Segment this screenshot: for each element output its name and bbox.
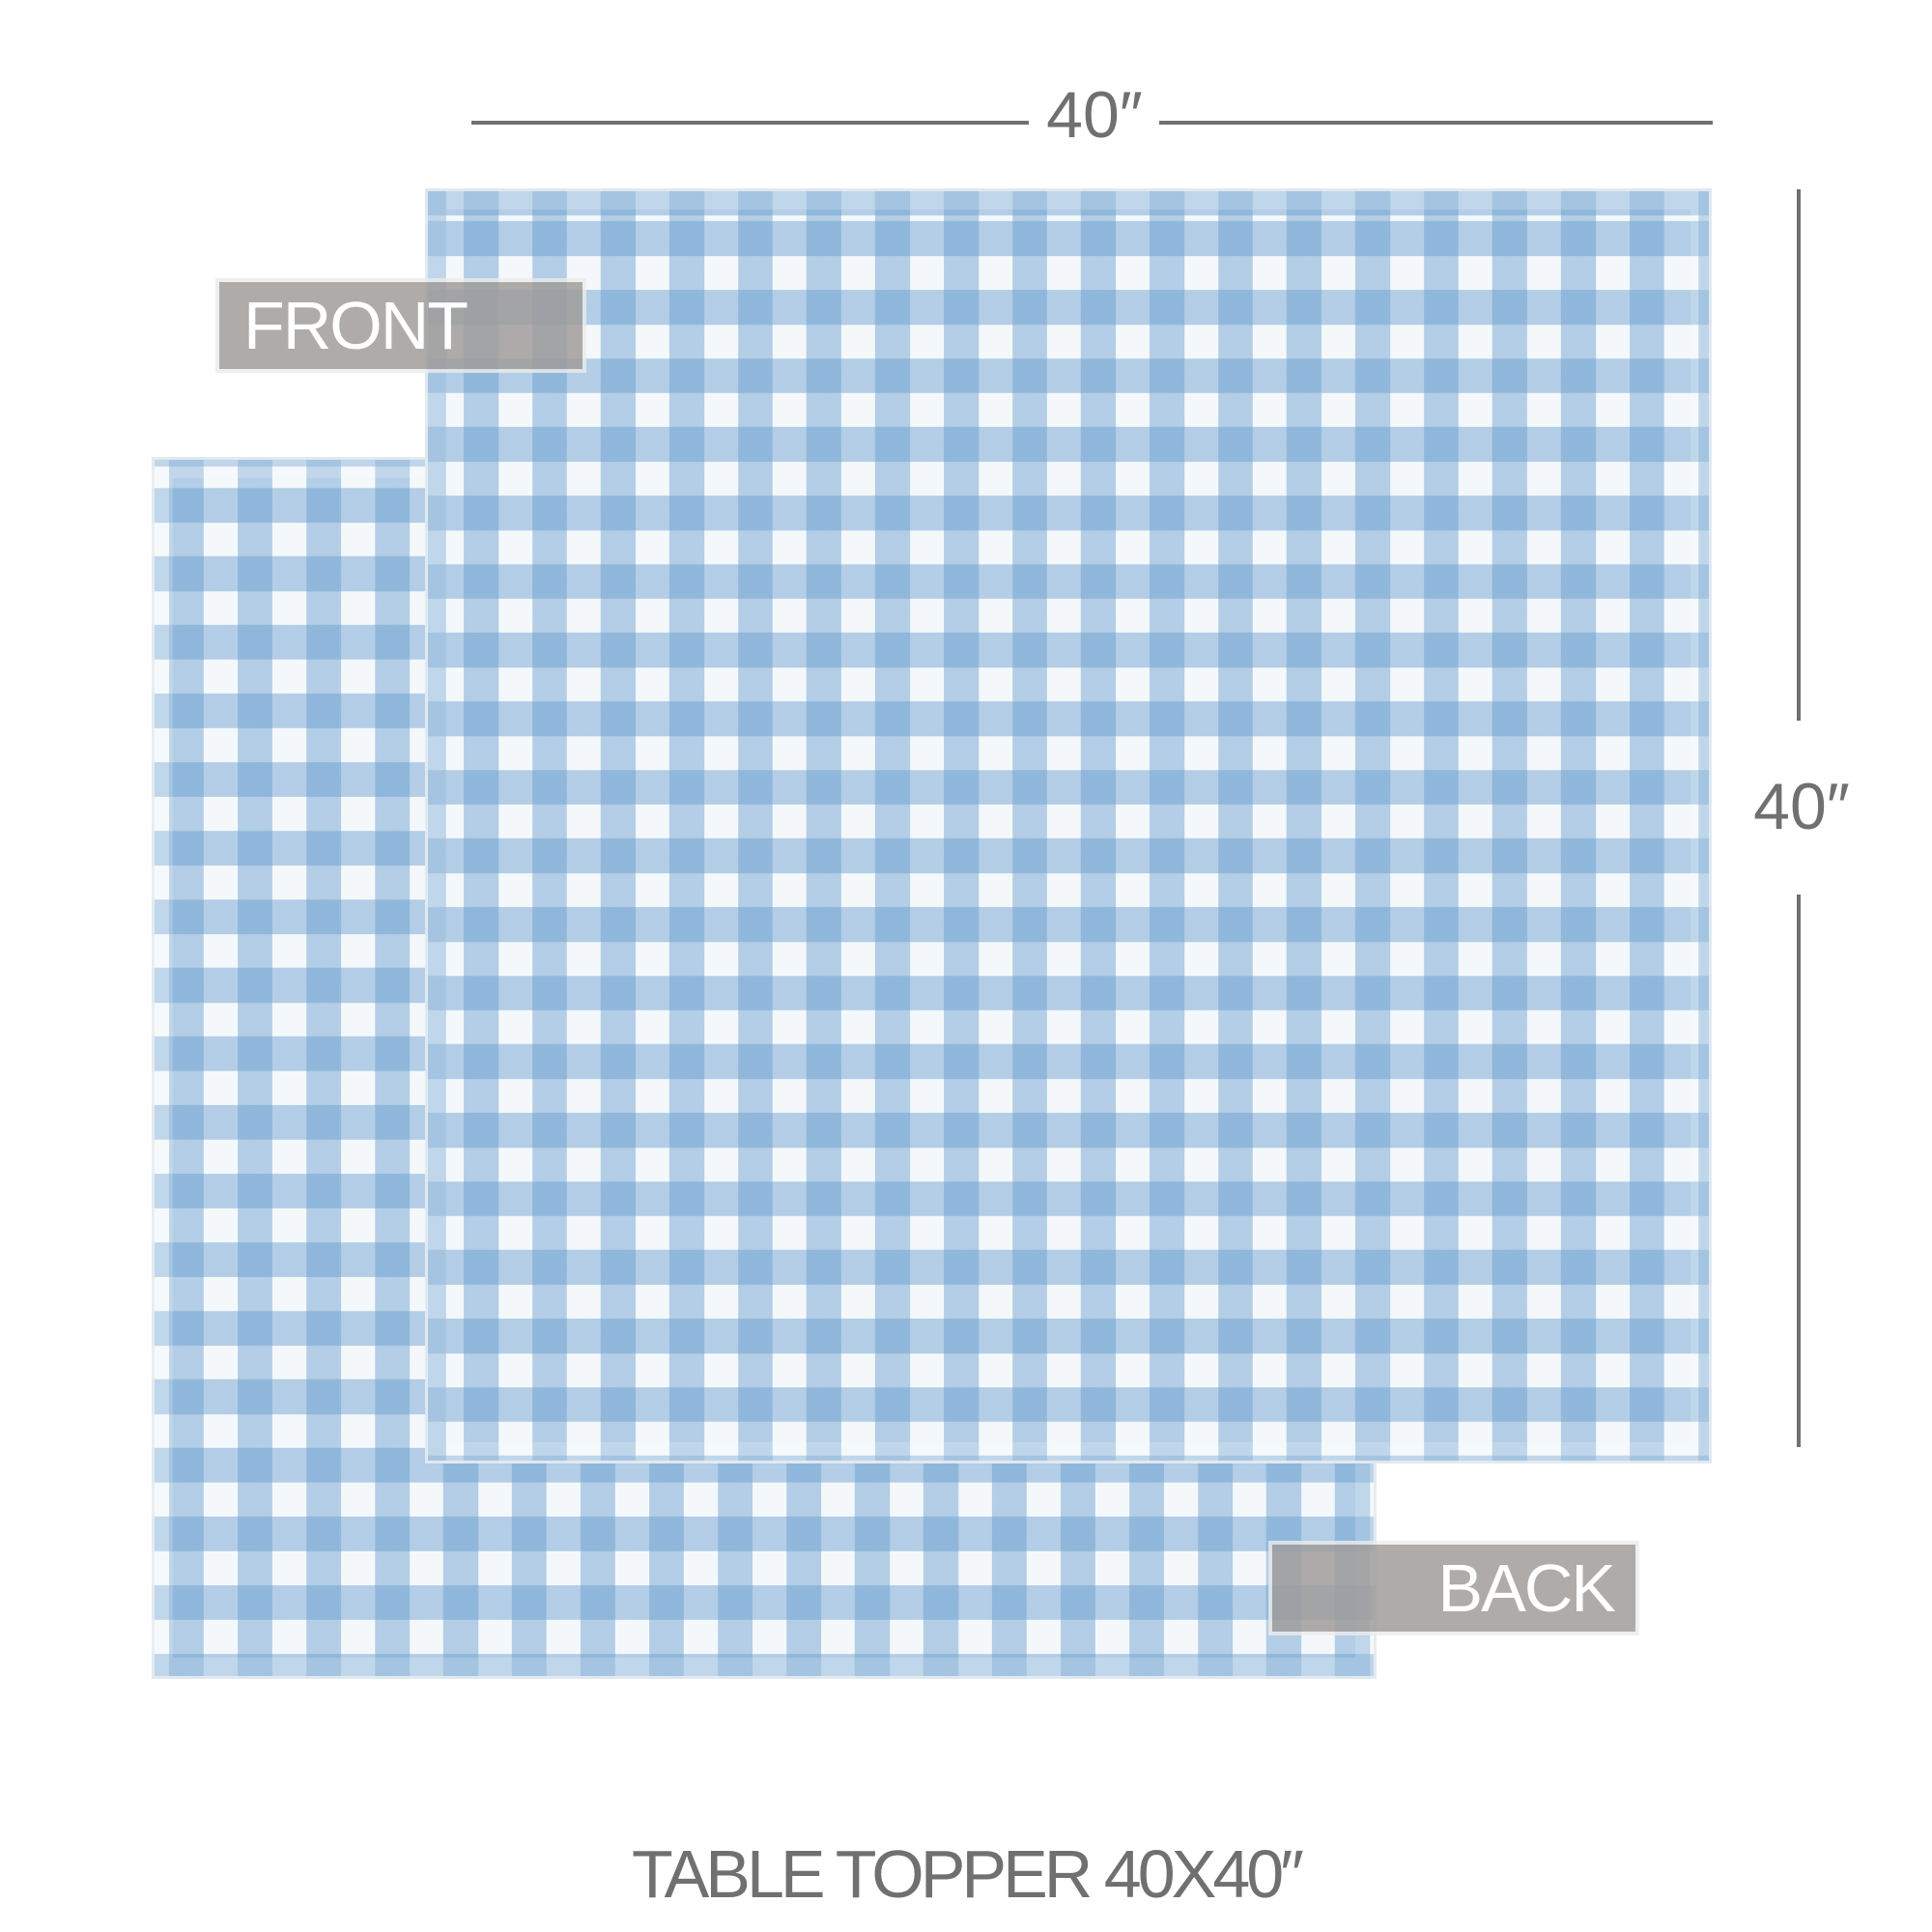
title: TABLE TOPPER 40X40″	[632, 1836, 1300, 1912]
back cloth	[152, 457, 1377, 1679]
dimension: height: 40″	[1753, 770, 1850, 843]
label: front: FRONT	[243, 288, 467, 363]
label: back: BACK	[1437, 1550, 1614, 1626]
front cloth	[425, 188, 1712, 1463]
dimension: width: 40″	[1046, 78, 1143, 152]
dimension: width	[471, 78, 1713, 152]
dimension: height	[1753, 189, 1850, 1447]
label: back	[1272, 1545, 1635, 1632]
label: front	[219, 282, 582, 369]
